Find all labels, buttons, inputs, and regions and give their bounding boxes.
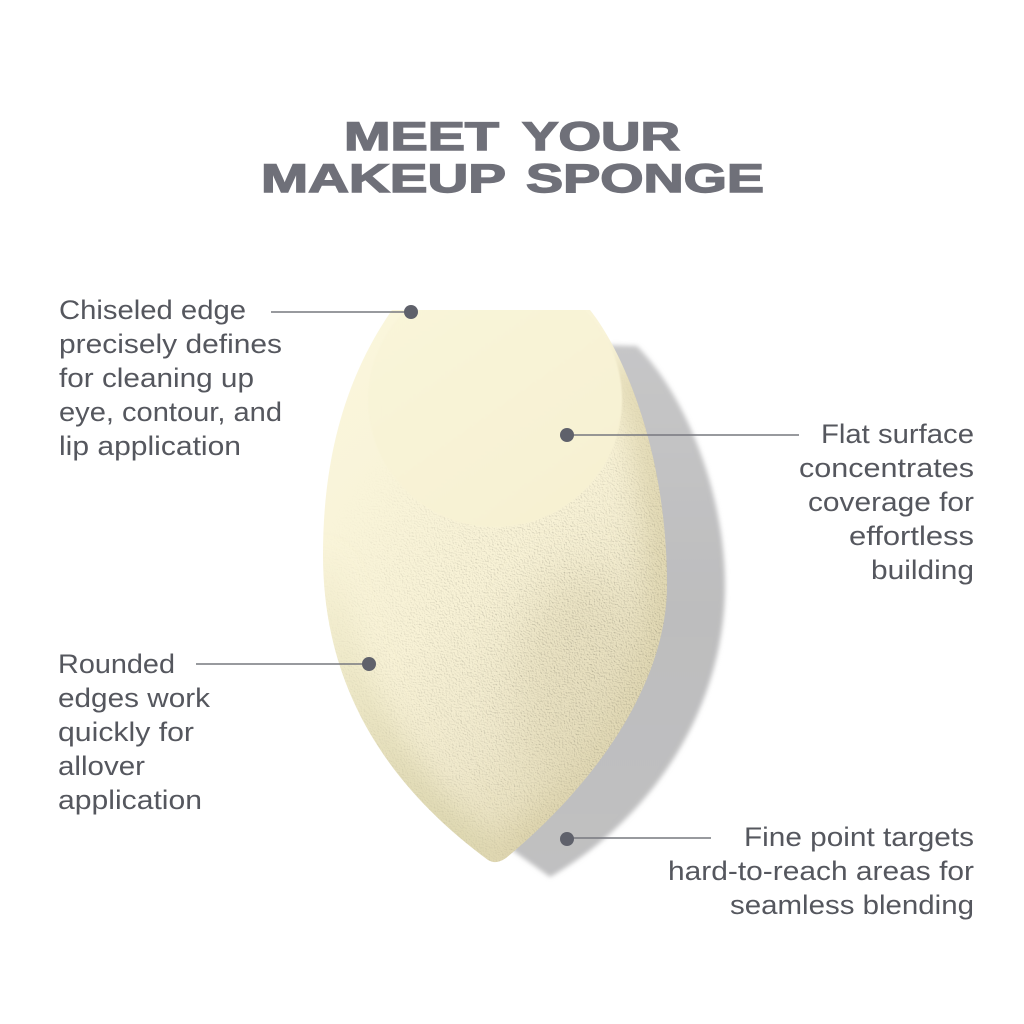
callout: fine point: hard-to-reach areas for bbox=[668, 856, 974, 886]
sponge centre-right shading bbox=[524, 580, 622, 730]
callout: flat surface bbox=[560, 419, 974, 585]
title: YOUR bbox=[522, 115, 680, 159]
callout: fine point: Fine point targets bbox=[744, 822, 974, 852]
callout: chiseled edge: Chiseled edge bbox=[59, 295, 246, 325]
sponge lower-left edge shading bbox=[328, 615, 488, 859]
callout: chiseled edge bbox=[59, 295, 418, 461]
callout: flat surface: concentrates bbox=[799, 453, 974, 483]
callout: fine point bbox=[560, 822, 974, 920]
title bbox=[261, 115, 764, 201]
icon: sponge shadow bbox=[512, 345, 725, 877]
callout: chiseled edge: lip application bbox=[59, 431, 241, 461]
callout: rounded edges: application bbox=[58, 785, 202, 815]
sponge right-edge shading bbox=[500, 360, 666, 868]
callout: flat surface: Flat surface bbox=[821, 419, 974, 449]
callout: rounded edges: quickly for bbox=[58, 717, 194, 747]
callout: rounded edges: edges work bbox=[58, 683, 211, 713]
callout: rounded edges: Rounded bbox=[58, 649, 175, 679]
icon: makeup sponge bbox=[323, 310, 667, 862]
sponge grain texture bbox=[332, 398, 667, 862]
sponge body bbox=[323, 310, 666, 862]
callout: flat surface: coverage for bbox=[808, 487, 974, 517]
title: SPONGE bbox=[526, 157, 764, 201]
callout: chiseled edge: for cleaning up bbox=[59, 363, 254, 393]
flat chiseled face bbox=[468, 360, 622, 527]
callout: rounded edges bbox=[58, 649, 376, 815]
title: MAKEUP bbox=[261, 157, 506, 201]
callout: chiseled edge: precisely defines bbox=[59, 329, 282, 359]
callout: fine point: seamless blending bbox=[730, 890, 974, 920]
callout: chiseled edge: eye, contour, and bbox=[59, 397, 282, 427]
title: MEET bbox=[344, 115, 499, 159]
callout: flat surface: effortless bbox=[849, 521, 974, 551]
callout: rounded edges: allover bbox=[58, 751, 145, 781]
callout: flat surface: building bbox=[871, 555, 974, 585]
